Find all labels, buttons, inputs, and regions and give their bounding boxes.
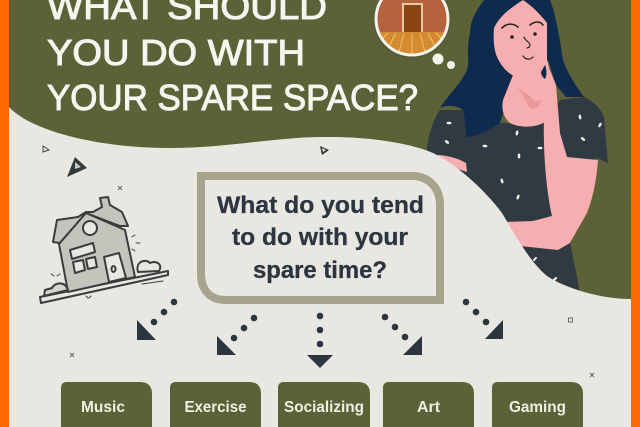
arrow: to Gaming — [463, 299, 503, 339]
question box — [201, 176, 440, 300]
button: Gaming: Gaming — [509, 399, 566, 416]
neck and chest — [502, 70, 556, 127]
question text: to do with your — [232, 224, 408, 251]
shirt dots — [444, 114, 602, 282]
fingernail hair gap — [541, 65, 546, 79]
panel: cream curved content background — [9, 107, 631, 427]
button: Gaming — [492, 382, 583, 427]
upper window — [70, 243, 95, 259]
eyes — [510, 35, 514, 39]
round window — [83, 221, 97, 235]
house sparkle marks — [51, 235, 163, 298]
question text — [217, 192, 424, 284]
arrow: to Art — [382, 314, 422, 355]
nose and mouth — [523, 37, 533, 59]
title — [47, 0, 418, 118]
ground — [40, 271, 168, 303]
icon: house — [40, 197, 168, 303]
decorative small marks — [70, 186, 594, 377]
icon: thought bubble with room and door — [370, 0, 455, 69]
house body — [59, 213, 135, 292]
arrow: to Socializing — [307, 313, 333, 368]
eyebrows — [502, 22, 543, 28]
hair — [440, 0, 584, 137]
button: Exercise — [170, 382, 261, 427]
button: Art — [383, 382, 474, 427]
bushes — [137, 261, 160, 272]
shirt — [420, 97, 608, 300]
lower windows — [73, 257, 97, 273]
raised arm and finger — [503, 58, 598, 250]
olive area beside the torso — [570, 200, 631, 300]
title: YOU DO WITH — [47, 32, 305, 73]
question text: What do you tend — [217, 192, 424, 219]
button: Music: Music — [81, 399, 125, 416]
button: Music — [61, 382, 152, 427]
resting hand — [437, 155, 467, 172]
arrow: to Exercise — [217, 315, 257, 355]
hand shadow — [517, 87, 541, 109]
button: Exercise: Exercise — [184, 399, 247, 416]
button: Socializing: Socializing — [284, 399, 364, 416]
button: Socializing — [278, 382, 370, 427]
door — [104, 253, 126, 282]
face — [494, 0, 547, 79]
panel: olive header background — [9, 0, 631, 300]
question text: spare time? — [253, 257, 387, 284]
illustration: thinking woman — [420, 0, 631, 300]
arrow: to Music — [137, 299, 177, 340]
button: Art: Art — [417, 399, 440, 416]
title: YOUR SPARE SPACE? — [47, 77, 418, 118]
roof and chimney — [53, 197, 128, 243]
decorative triangle icons — [43, 146, 329, 177]
